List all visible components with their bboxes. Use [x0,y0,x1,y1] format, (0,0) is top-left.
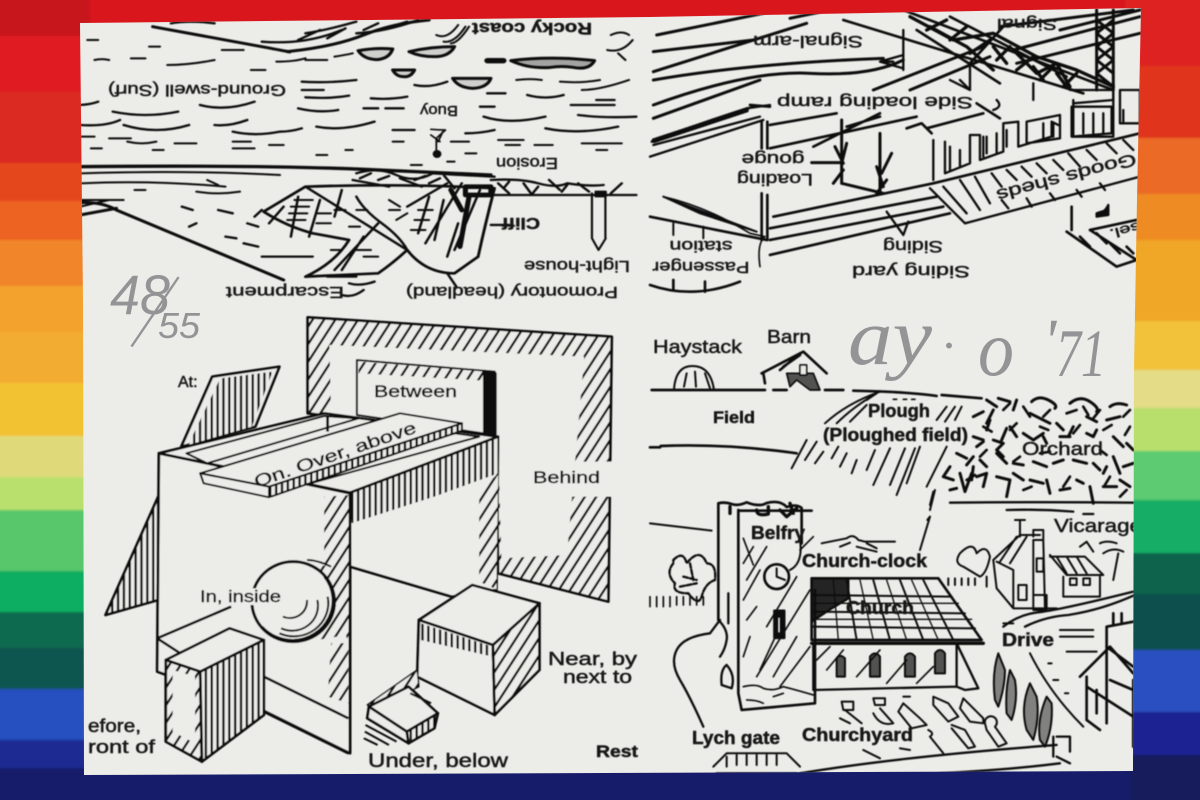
plank, on over above [200,413,462,497]
label: Field: Field [713,408,755,427]
label: Buoy: Buoy [419,102,458,119]
handwritten date [848,294,1106,392]
label: Haystack: Haystack [653,337,743,357]
label: Rocky coast: Rocky coast [472,19,592,38]
diagram drawing [105,317,613,762]
label: Plough: Plough [868,401,930,421]
handwritten score: / [119,255,190,371]
between panel [357,360,495,436]
cube, near [417,585,539,715]
label: Between: Between [374,382,457,401]
label: Lych gate: Lych gate [692,728,780,748]
label: Churchyard: Churchyard [802,725,913,745]
panel: countryside [650,327,1142,773]
label: in front of: ront of [88,737,156,757]
label: In, inside: In, inside [200,587,281,606]
ball [250,558,344,644]
label: Escarpment: Escarpment [225,283,344,300]
label: Ground-swell: Ground-swell (Surf) [108,81,286,98]
farm, field and orchard drawing [650,352,1133,520]
label: Behind: Behind [533,468,600,487]
label: Belfry: Belfry [751,523,805,543]
label: Signal: Signal [997,15,1057,32]
plate, beside [105,497,158,615]
church and village drawing [650,490,1135,773]
label: Ploughed field: (Ploughed field) [823,425,968,445]
label: Church: Church [846,598,914,618]
block, before [166,628,264,762]
open box [157,413,498,753]
label: next to: next to [563,667,632,687]
label: Siding: Siding [883,237,943,256]
label: Drive: Drive [1002,630,1054,650]
label: Orchard: Orchard [1022,439,1103,459]
slab, under [364,670,438,745]
label: gauge: gouge [742,150,804,169]
label: Goods sheds: Goods sheds [994,150,1138,205]
label: Church-clock: Church-clock [802,551,928,571]
handwritten score: 48 [110,263,170,326]
handwritten date: 71 [1056,315,1106,391]
handwritten date: ay [848,294,933,382]
label: At: At: [178,374,198,391]
panel: prepositions diagram [88,317,638,772]
label: Barn: Barn [767,327,811,347]
handwritten date: o [978,305,1014,392]
handwritten date: ' [1043,308,1058,376]
label: Erosion: Erosion [496,154,558,171]
handwritten date: · [942,317,954,373]
plate, at [181,367,279,447]
label: Promontory: Promontory (headland) [406,283,618,300]
label: Rest: Rest [596,742,638,761]
label: Siding yard: Siding yard [852,262,970,281]
label: before: efore, [88,716,141,736]
label: cut-off word: sel. [1108,219,1143,242]
back wall, behind [308,317,613,602]
label: Signal-arm: Signal-arm [753,32,863,51]
handwritten score: 55 [158,305,201,346]
panel: railway (upside down) [650,10,1143,292]
label: On, Over, above: On. Over, above [252,418,419,491]
panel: coast (upside down) [80,19,636,300]
label: Under, below: Under, below [368,751,508,772]
label: Near, by: Near, by [548,649,637,669]
coast line drawing [80,20,636,296]
label: Cliff: Cliff [501,214,540,231]
label: Vicarage: Vicarage [1054,516,1142,536]
label: Passenger: Passenger [652,258,750,275]
label: Light-house: Light-house [524,257,630,274]
label: station: station [669,237,733,254]
label: Side loading ramp: Side loading ramp [777,93,973,112]
railway line drawing [650,10,1140,292]
label: Loading: Loading [737,170,813,189]
